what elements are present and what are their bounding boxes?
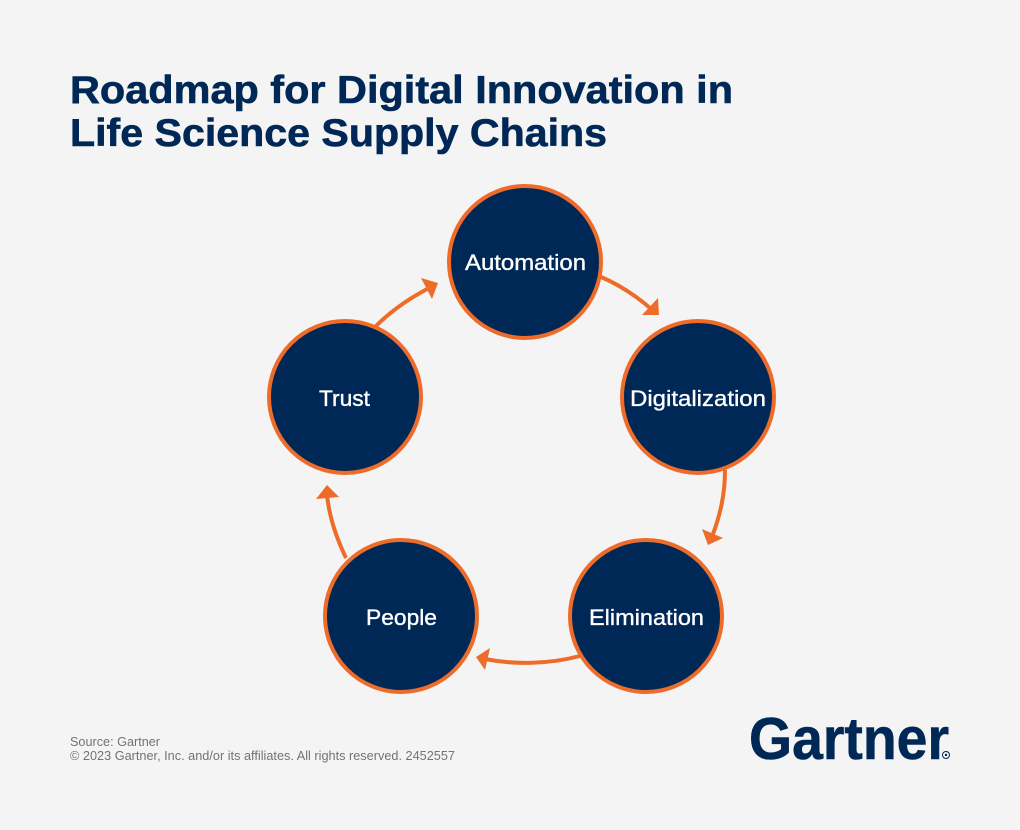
arrow: Elimination to People: [476, 648, 580, 670]
source and copyright note: © 2023 Gartner, Inc. and/or its affiliates. All rights reserved. 2452557: [70, 749, 455, 763]
node: Trust: [269, 321, 421, 473]
node: Digitalization: Digitalization: [630, 386, 766, 411]
node: Elimination: Elimination: [589, 605, 704, 630]
node: Elimination: [570, 540, 722, 692]
node: People: [325, 540, 477, 692]
node: People: People: [366, 605, 437, 630]
arrow: Automation to Digitalization: [601, 277, 659, 315]
arrow: Digitalization to Elimination: [702, 470, 725, 545]
node: Automation: [449, 186, 601, 338]
source and copyright note: Source: Gartner: [70, 735, 160, 749]
node: Automation: Automation: [465, 250, 586, 275]
node: Trust: Trust: [319, 386, 370, 411]
source and copyright note: [70, 735, 455, 763]
title: Life Science Supply Chains: [70, 112, 607, 155]
title: [70, 69, 733, 155]
title: Roadmap for Digital Innovation in: [70, 69, 733, 112]
node: Digitalization: [622, 321, 774, 473]
arrow: Trust to Automation: [376, 278, 438, 326]
Gartner logo: Gartner: [749, 706, 949, 772]
arrow: People to Trust: [316, 485, 346, 558]
